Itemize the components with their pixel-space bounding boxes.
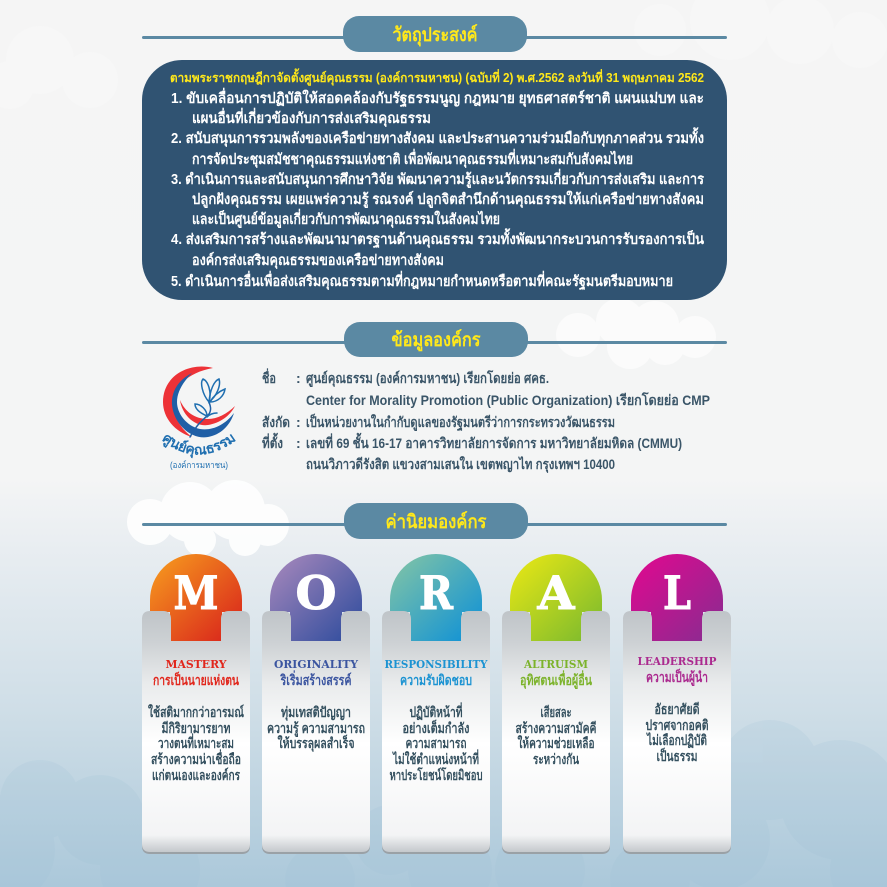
objectives list: 3. ดำเนินการและสนับสนุนการศึกษาวิจัย พัฒนาความรู้และนวัตกรรมเกี่ยวกับการส่งเสริม และการ <box>171 168 704 188</box>
objectives list: การจัดประชุมสมัชชาคุณธรรมแห่งชาติ เพื่อพัฒนาคุณธรรมที่เหมาะสมกับสังคมไทย <box>192 148 633 168</box>
objectives list: องค์กรส่งเสริมคุณธรรมของเครือข่ายทางสังคม <box>192 251 444 269</box>
organization details text <box>262 368 710 473</box>
card: A Altruism: ระหว่างกัน <box>533 751 579 767</box>
objectives list: 1. ขับเคลื่อนการปฏิบัติให้สอดคล้องกับรัฐธรรมนูญ กฎหมาย ยุทธศาสตร์ชาติ แผนแม่บท และ <box>171 87 704 108</box>
objectives list: 5. ดำเนินการอื่นเพื่อส่งเสริมคุณธรรมตามที่กฎหมายกำหนดหรือตามที่คณะรัฐมนตรีมอบหมาย <box>171 270 673 291</box>
organization details text: สังกัด <box>262 414 290 430</box>
card: L Leadership <box>623 554 731 854</box>
card: L Leadership: L <box>663 566 691 620</box>
logo: Center for Morality Promotion <box>162 366 236 470</box>
card: M Mastery: วางตนที่เหมาะสม <box>158 733 234 751</box>
card: R Responsibility: RESPONSIBILITY <box>384 657 488 671</box>
card: M Mastery: การเป็นนายแห่งตน <box>153 671 239 688</box>
divider line: objectives <box>142 36 727 39</box>
card: O Originality: ORIGINALITY <box>274 657 359 671</box>
heading: objectives <box>343 16 527 52</box>
card: M Mastery: MASTERY <box>166 657 227 671</box>
organization details text: ศูนย์คุณธรรม (องค์การมหาชน) เรียกโดยย่อ ศคธ. <box>306 369 549 387</box>
card: R Responsibility: ความสามารถ <box>406 735 466 751</box>
card: A Altruism: อุทิศตนเพื่อผู้อื่น <box>520 670 592 689</box>
divider line: organization <box>142 341 727 344</box>
organization details text: : <box>296 414 301 430</box>
card: M Mastery: แก่ตนเองและองค์กร <box>152 767 240 783</box>
organization details text: ถนนวิภาวดีรังสิต แขวงสามเสนใน เขตพญาไท กรุงเทพฯ 10400 <box>306 455 615 473</box>
card: L Leadership: ความเป็นผู้นำ <box>646 668 708 686</box>
card: M Mastery: สร้างความน่าเชื่อถือ <box>151 749 241 767</box>
objectives list: 2. สนับสนุนการรวมพลังของเครือข่ายทางสังคม และประสานความร่วมมือกับทุกภาคส่วน รวมทั้ง <box>171 127 704 147</box>
heading: organizational values <box>344 503 528 539</box>
heading: objectives: วัตถุประสงค์ <box>392 24 478 47</box>
card: O Originality: O <box>296 566 336 620</box>
card: O Originality: ริเริ่มสร้างสรรค์ <box>279 670 351 688</box>
organization details text: Center for Morality Promotion (Public Organization) เรียกโดยย่อ CMP <box>306 391 710 408</box>
card: M Mastery: ใช้สติมากกว่าอารมณ์ <box>148 703 244 720</box>
objectives intro line: ตามพระราชกฤษฎีกาจัดตั้งศูนย์คุณธรรม (องค์การมหาชน) (ฉบับที่ 2) พ.ศ.2562 ลงวันที่ 31 พฤษภาคม 2562 <box>170 68 704 86</box>
card: R Responsibility: ไม่ใช้ตำแหน่งหน้าที่ <box>392 749 479 767</box>
organization details text: เป็นหน่วยงานในกำกับดูแลของรัฐมนตรีว่าการกระทรวงวัฒนธรรม <box>306 413 615 432</box>
card: L Leadership: ปราศจากอคติ <box>646 717 708 733</box>
divider line: values <box>142 523 727 526</box>
card: O Originality: ความรู้ ความสามารถ <box>267 720 365 737</box>
card: A Altruism: สร้างความสามัคคี <box>516 720 596 736</box>
organization details text: : <box>296 370 301 386</box>
heading: organization info <box>344 322 528 357</box>
card: O Originality <box>262 554 370 854</box>
organization details text: ชื่อ <box>262 368 276 386</box>
card: O Originality: ให้บรรลุผลสำเร็จ <box>278 734 354 752</box>
card: A Altruism: ให้ความช่วยเหลือ <box>518 734 594 751</box>
card: R Responsibility: R <box>419 566 454 620</box>
card: L Leadership: เป็นธรรม <box>656 747 698 764</box>
card: M Mastery: M <box>174 566 218 620</box>
card: A Altruism: A <box>536 566 576 620</box>
card: M Mastery <box>142 554 250 854</box>
card: R Responsibility: อย่างเต็มกำลัง <box>402 719 470 736</box>
card: A Altruism <box>502 554 610 854</box>
card: O Originality: ทุ่มเทสติปัญญา <box>281 704 351 721</box>
card: L Leadership: LEADERSHIP <box>638 654 717 668</box>
logo: Center for Morality Promotion: (องค์การมหาชน) <box>170 459 228 470</box>
card: L Leadership: อัธยาศัยดี <box>654 701 700 717</box>
organization details text: : <box>296 435 301 451</box>
card: A Altruism: ALTRUISM <box>523 657 588 671</box>
objectives list: ปลูกฝังคุณธรรม เผยแพร่ความรู้ รณรงค์ ปลูกจิตสำนึกด้านคุณธรรมให้แก่เครือข่ายทางสังคม <box>192 190 704 208</box>
card: R Responsibility: หาประโยชน์โดยมิชอบ <box>390 766 483 783</box>
card: R Responsibility: ความรับผิดชอบ <box>400 672 472 688</box>
objectives list <box>171 87 704 291</box>
heading: organizational values: ค่านิยมองค์กร <box>386 511 487 533</box>
logo: Center for Morality Promotion: ศูนย์คุณธรรม <box>162 434 236 458</box>
heading: organization info: ข้อมูลองค์กร <box>392 329 481 352</box>
card: L Leadership: ไม่เลือกปฏิบัติ <box>646 731 707 749</box>
objectives list: 4. ส่งเสริมการสร้างและพัฒนามาตรฐานด้านคุณธรรม รวมทั้งพัฒนากระบวนการรับรองการเป็น <box>171 228 704 249</box>
organization details text: เลขที่ 69 ชั้น 16-17 อาคารวิทยาลัยการจัดการ มหาวิทยาลัยมหิดล (CMMU) <box>306 432 682 451</box>
card: A Altruism: เสียสละ <box>540 704 572 720</box>
card: M Mastery: มีกิริยามารยาท <box>162 720 230 736</box>
objectives list: และเป็นศูนย์ข้อมูลเกี่ยวกับการพัฒนาคุณธรรมในสังคมไทย <box>192 208 500 228</box>
card: R Responsibility: ปฏิบัติหน้าที่ <box>410 702 462 721</box>
panel: objectives <box>142 60 727 300</box>
objectives list: แผนอื่นที่เกี่ยวข้องกับการส่งเสริมคุณธรรม <box>192 107 431 127</box>
card: R Responsibility <box>382 554 490 854</box>
organization details text: ที่ตั้ง <box>262 432 283 451</box>
